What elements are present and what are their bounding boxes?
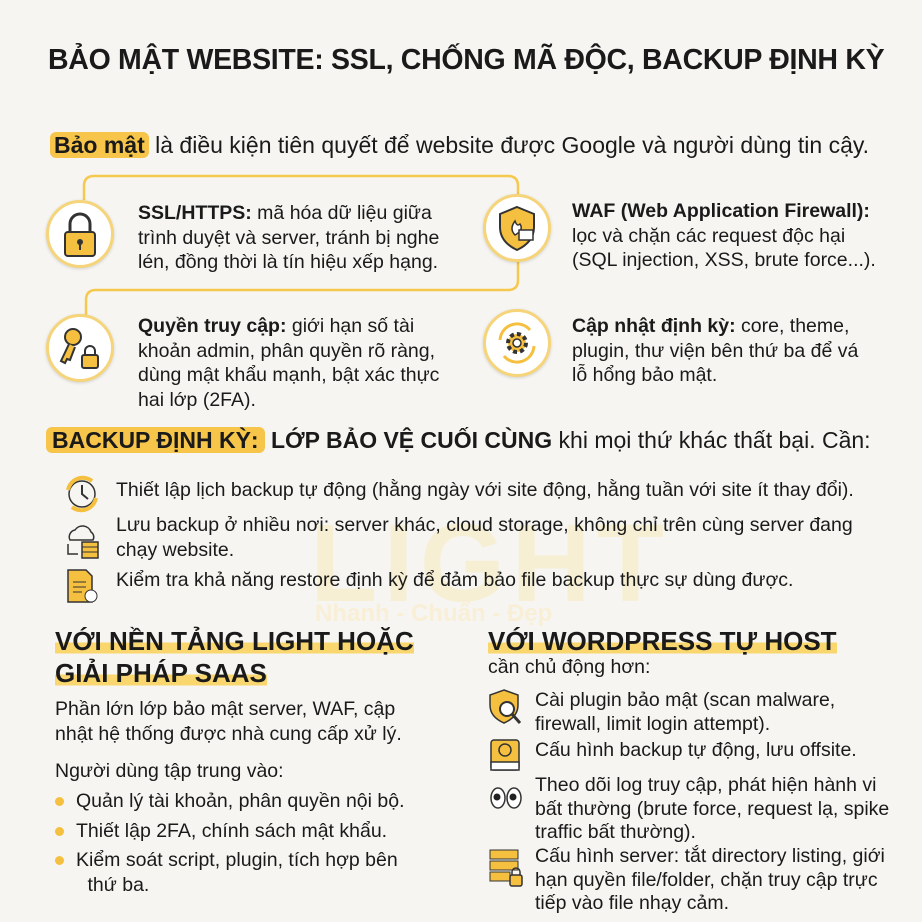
right panel: WordPress: Theo dõi log truy cập, phát hiện hành vi	[535, 774, 876, 796]
right panel: WordPress: cần chủ động hơn:	[488, 656, 650, 678]
icon: cloud	[67, 525, 99, 559]
icon: lock	[46, 200, 114, 268]
left panel: SaaS: Kiểm soát script, plugin, tích hợp bên	[76, 849, 398, 871]
right panel: WordPress: tiếp vào file nhạy cảm.	[535, 892, 729, 914]
text: SSL: lén, đồng thời là tín hiệu xếp hạng.	[138, 251, 438, 273]
right panel: WordPress: traffic bất thường).	[535, 821, 696, 843]
text: SSL: SSL/HTTPS: mã hóa dữ liệu giữa	[138, 202, 432, 224]
backup items: Lưu backup ở nhiều nơi: server khác, cloud storage, không chỉ trên cùng server đang	[116, 514, 853, 536]
backup items: Thiết lập lịch backup tự động (hằng ngày với site động, hằng tuần với site ít thay đổi).	[116, 479, 854, 501]
right panel: WordPress: Cài plugin bảo mật (scan malware,	[535, 689, 835, 711]
text: access: dùng mật khẩu mạnh, bật xác thực	[138, 364, 439, 386]
icon: shield	[483, 194, 551, 262]
heading: VỚI NỀN TẢNG LIGHT HOẶC	[55, 626, 414, 656]
right panel: WordPress: Cấu hình backup tự động, lưu offsite.	[535, 739, 857, 761]
icon: server lock	[490, 850, 523, 887]
heading: GIẢI PHÁP SAAS	[55, 658, 267, 688]
intro: Bảo mật là điều kiện tiên quyết để website được Google và người dùng tin cậy.	[54, 132, 869, 158]
text: updates: lỗ hổng bảo mật.	[572, 364, 717, 386]
icon: shield search	[489, 689, 521, 724]
title: BẢO MẬT WEBSITE: SSL, CHỐNG MÃ ĐỘC, BACKUP ĐỊNH KỲ	[48, 44, 884, 76]
right panel: WordPress: bất thường (brute force, request lạ, spike	[535, 798, 889, 820]
text: access: hai lớp (2FA).	[138, 388, 256, 410]
text: WAF	[572, 200, 876, 271]
right panel: WordPress: firewall, limit login attempt).	[535, 712, 770, 734]
icon: drive	[490, 739, 520, 771]
text: access: Quyền truy cập: giới hạn số tài	[138, 315, 414, 337]
watermark tagline: Nhanh - Chuẩn - Đẹp	[315, 600, 552, 627]
text: updates	[572, 315, 858, 386]
right panel: WordPress: Cấu hình server: tắt directory listing, giới	[535, 845, 885, 867]
paragraph: nhật hệ thống được nhà cung cấp xử lý.	[55, 722, 402, 744]
heading: VỚI WORDPRESS TỰ HOST	[488, 626, 837, 656]
text: WAF: (SQL injection, XSS, brute force...).	[572, 249, 876, 271]
left panel: SaaS	[55, 626, 414, 896]
text: updates: plugin, thư viện bên thứ ba để vá	[572, 340, 858, 362]
bullets: Quản lý tài khoản, phân quyền nội bộ.	[76, 790, 404, 812]
icon: clock	[66, 476, 98, 512]
text: access: khoản admin, phân quyền rõ ràng,	[138, 340, 435, 362]
left panel: SaaS: Người dùng tập trung vào:	[55, 760, 284, 782]
text: access	[138, 315, 439, 410]
icon: document	[67, 569, 98, 603]
watermark: LIGHT	[310, 502, 670, 625]
text: WAF: WAF (Web Application Firewall):	[572, 200, 870, 222]
backup items: Kiểm tra khả năng restore định kỳ để đảm bảo file backup thực sự dùng được.	[116, 569, 793, 591]
icon: key	[46, 314, 114, 382]
text: SSL: trình duyệt và server, tránh bị nghe	[138, 226, 439, 248]
right panel: WordPress	[488, 626, 889, 914]
icon: update gear	[483, 309, 551, 377]
text: SSL	[138, 202, 439, 273]
left panel: SaaS: Thiết lập 2FA, chính sách mật khẩu.	[76, 820, 387, 842]
left panel: SaaS: thứ ba.	[88, 874, 149, 896]
text: updates: Cập nhật định kỳ: core, theme,	[572, 315, 849, 337]
paragraph	[55, 698, 402, 744]
icon: eyes	[490, 787, 522, 809]
right panel: WordPress: hạn quyền file/folder, chặn truy cập trực	[535, 868, 878, 890]
paragraph: Phần lớn lớp bảo mật server, WAF, cập	[55, 698, 395, 720]
backup items: chạy website.	[116, 538, 234, 560]
text: WAF: lọc và chặn các request độc hại	[572, 224, 845, 246]
backup items	[66, 476, 854, 603]
backup heading: BACKUP ĐỊNH KỲ: LỚP BẢO VỆ CUỐI CÙNG khi mọi thứ khác thất bại. Cần:	[52, 427, 871, 453]
heading	[55, 626, 414, 688]
